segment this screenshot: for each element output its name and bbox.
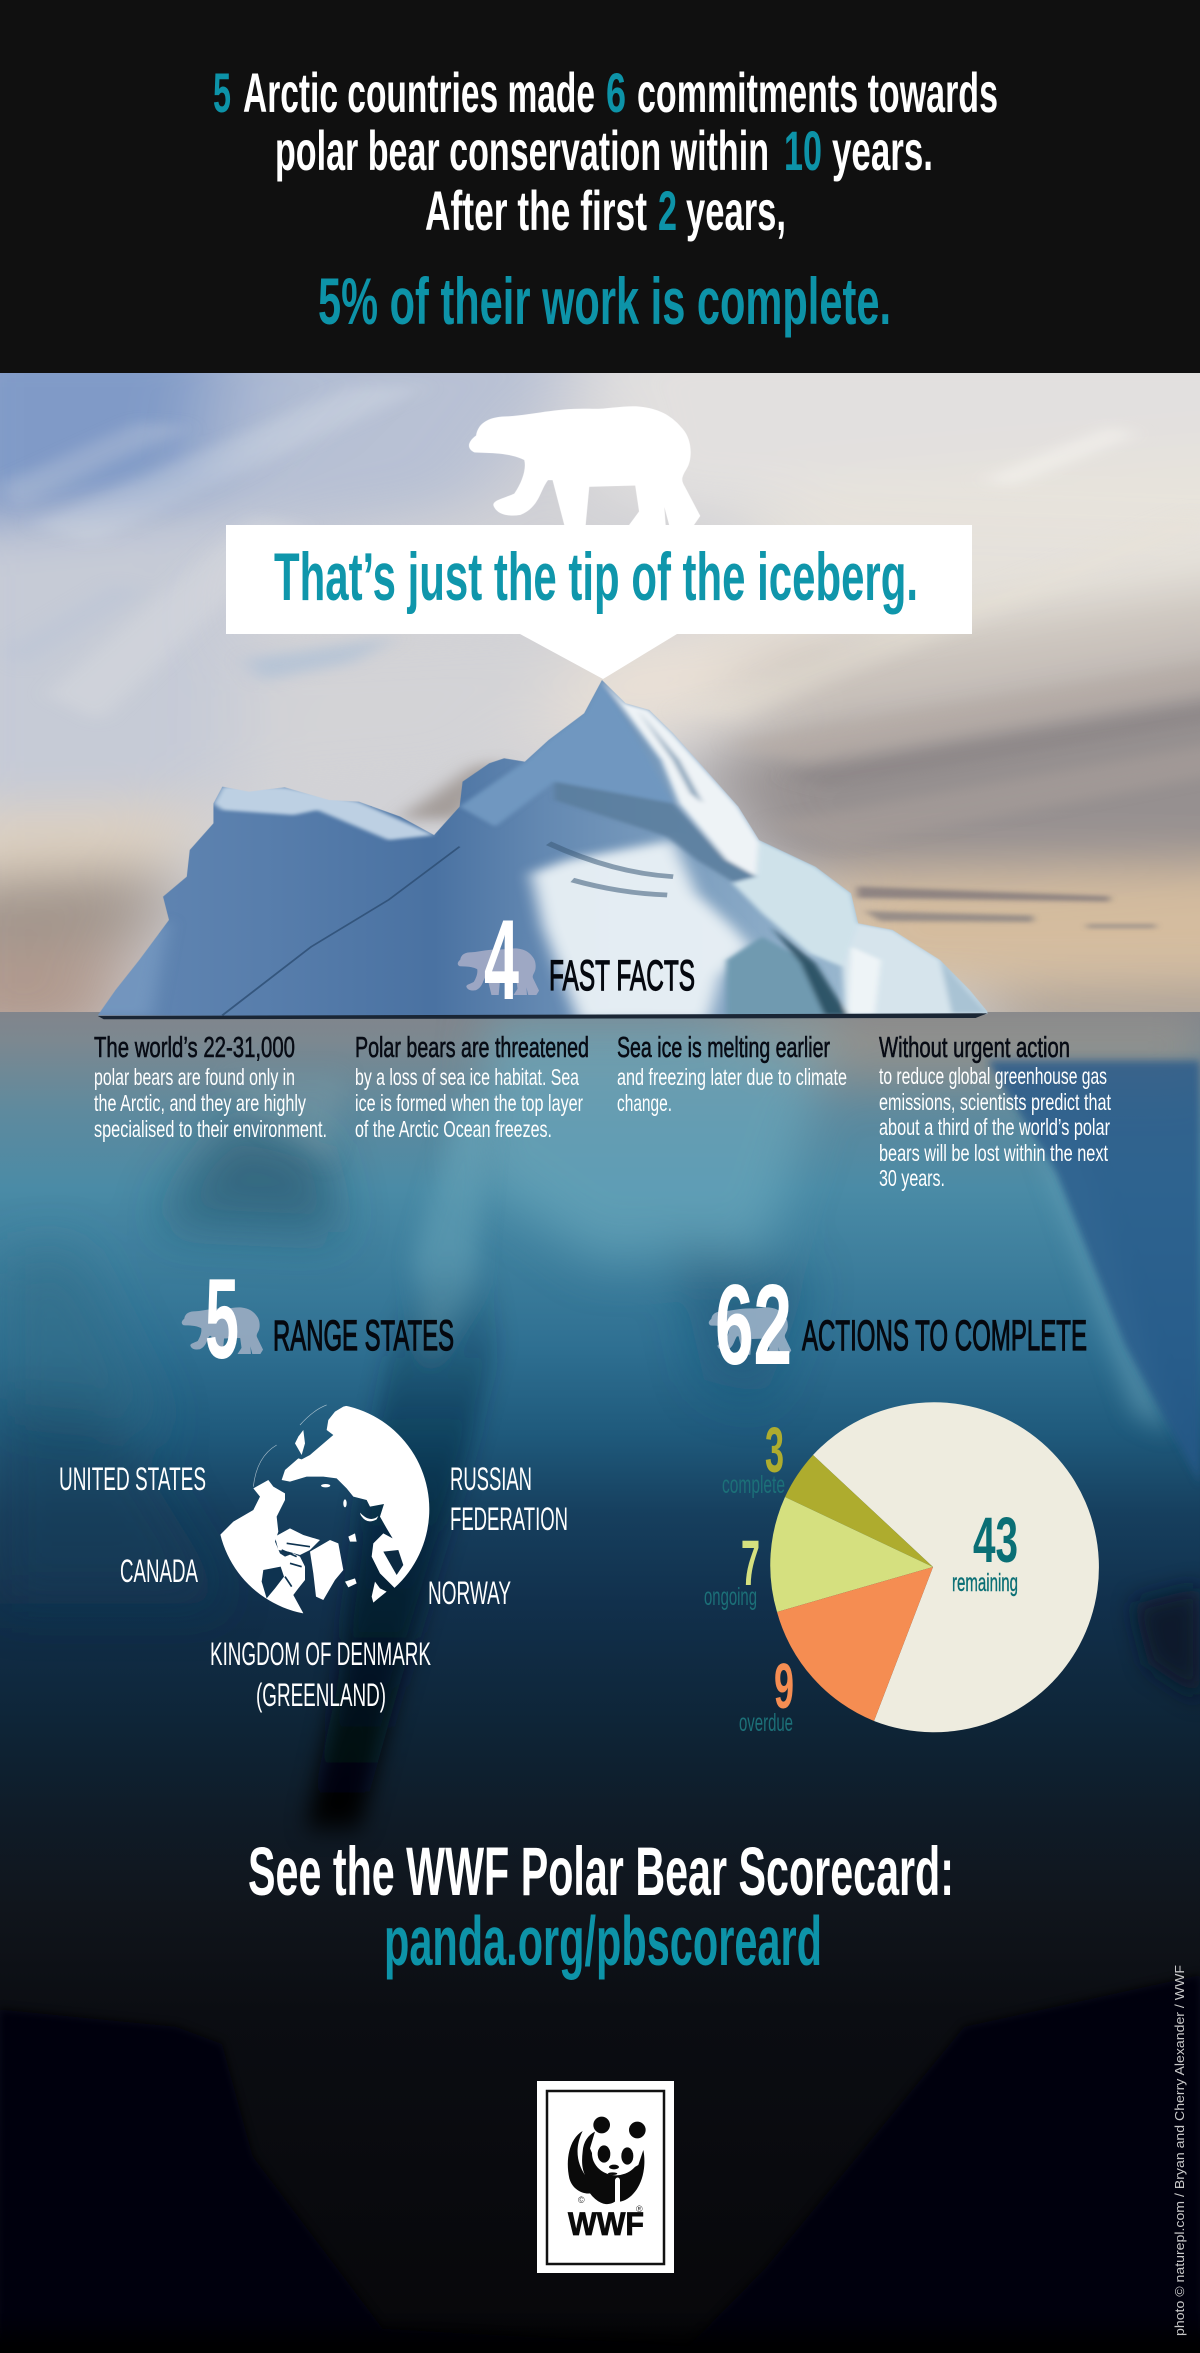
pie label: 43 remaining — [952, 1504, 1018, 1597]
map label: Norway: NORWAY — [428, 1575, 511, 1611]
map label: United States: UNITED STATES — [59, 1461, 206, 1497]
callout: tip of the iceberg — [226, 525, 972, 679]
pie label: 3 complete — [722, 1414, 785, 1499]
fact column 1 — [94, 1032, 327, 1142]
fact column 4: emissions, scientists predict that — [879, 1089, 1111, 1115]
pie chart — [704, 1402, 1099, 1737]
iceberg above water — [98, 680, 988, 1020]
pie slice: complete — [785, 1455, 933, 1567]
header text: first two years: After the first — [425, 179, 647, 242]
fact column 1: polar bears are found only in — [94, 1064, 295, 1090]
map label: Kingdom of Denmark: KINGDOM OF DENMARK — [210, 1636, 431, 1672]
fact column 2: of the Arctic Ocean freezes. — [355, 1116, 552, 1142]
header text: commitments: 6 — [606, 61, 626, 124]
pie slice: overdue — [777, 1567, 933, 1721]
header text: conservation: years. — [832, 119, 933, 182]
header text: commitments: 5 — [213, 61, 231, 124]
WWF logo — [537, 2081, 674, 2273]
copyright marks: ® — [636, 2204, 643, 2214]
fact column 3: and freezing later due to climate — [617, 1064, 847, 1090]
Hudson Bay — [262, 1567, 284, 1598]
heading: 4 fast facts: FAST FACTS — [549, 952, 695, 1000]
pie label: 9 overdue: overdue — [739, 1709, 793, 1737]
heading: 5 range states: 5 — [205, 1256, 239, 1383]
fact column 2: ice is formed when the top layer — [355, 1090, 583, 1116]
header text: conservation: polar bear conservation within — [275, 119, 769, 182]
background: sky — [0, 373, 1200, 1012]
pie label: 9 overdue — [739, 1650, 794, 1737]
fact column 3: change. — [617, 1090, 672, 1116]
heading: 62 actions to complete — [709, 1262, 1087, 1389]
heading: 4 fast facts — [458, 897, 695, 1024]
fact column 2: by a loss of sea ice habitat. Sea — [355, 1064, 579, 1090]
map label: Russian Federation: FEDERATION — [450, 1501, 568, 1537]
fact column 4: bears will be lost within the next — [879, 1140, 1108, 1166]
header text: commitments: Arctic countries made — [243, 61, 595, 124]
pie slice: ongoing — [770, 1497, 933, 1612]
fact column 1: The world’s 22-31,000 — [94, 1032, 295, 1064]
logo wordmark: WWF — [568, 2206, 644, 2242]
map label: Canada: CANADA — [120, 1553, 198, 1589]
fact column 4 — [879, 1032, 1111, 1191]
polar bear silhouette — [469, 406, 700, 527]
fact column 3: Sea ice is melting earlier — [617, 1032, 830, 1064]
pie label: 43 remaining: 43 — [973, 1504, 1018, 1576]
Baltic Sea — [383, 1550, 403, 1575]
pie label: 7 ongoing: ongoing — [704, 1583, 757, 1611]
fact column 4: Without urgent action — [879, 1032, 1070, 1064]
photo credit: photo © naturepl.com / Bryan and Cherry Alexander / WWF — [1173, 1965, 1187, 2336]
arctic map — [220, 1404, 430, 1614]
header band — [0, 0, 1200, 373]
header text: first two years: 2 — [658, 179, 677, 242]
fact column 4: 30 years. — [879, 1165, 945, 1191]
map label: Russian Federation: RUSSIAN — [450, 1461, 532, 1497]
heading: 4 fast facts: 4 — [484, 897, 519, 1024]
pie label: 9 overdue: 9 — [774, 1650, 794, 1722]
map label: Kingdom of Denmark: (GREENLAND) — [256, 1677, 386, 1713]
pie slice: remaining — [813, 1402, 1099, 1732]
icon: bear — [458, 948, 539, 995]
icon: bear — [709, 1307, 791, 1355]
header text: conservation: 10 — [784, 119, 822, 182]
fact column 1: the Arctic, and they are highly — [94, 1090, 306, 1116]
fact column 2: Polar bears are threatened — [355, 1032, 589, 1064]
copyright marks: © — [578, 2195, 585, 2205]
fact column 3 — [617, 1032, 847, 1116]
background: water and submerged iceberg — [0, 1000, 1200, 2353]
heading: 62 actions to complete: 62 — [715, 1262, 792, 1389]
heading: 5 range states — [182, 1256, 454, 1383]
fact column 1: specialised to their environment. — [94, 1116, 327, 1142]
header text: first two years: years, — [686, 179, 786, 242]
call to action: panda.org/pbscoreard — [384, 1902, 822, 1980]
icon: bear — [182, 1307, 263, 1354]
pie label: 3 complete: 3 — [765, 1414, 784, 1486]
fact column 4: about a third of the world’s polar — [879, 1114, 1110, 1140]
pie label: 3 complete: complete — [722, 1471, 785, 1499]
fact column 2 — [355, 1032, 589, 1142]
pie label: 7 ongoing — [704, 1527, 760, 1611]
pie label: 43 remaining: remaining — [952, 1569, 1018, 1597]
pie label: 7 ongoing: 7 — [741, 1527, 760, 1599]
icon: panda — [568, 2117, 646, 2204]
heading: 5 range states: RANGE STATES — [273, 1312, 454, 1360]
call to action — [248, 1833, 954, 1980]
